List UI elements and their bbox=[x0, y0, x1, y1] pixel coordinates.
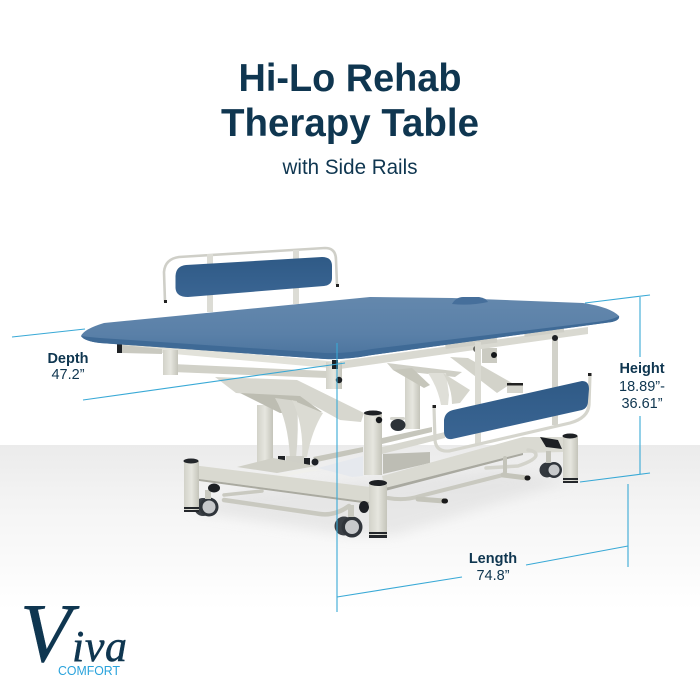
length lines bbox=[337, 343, 628, 612]
title: Therapy Table bbox=[221, 102, 479, 145]
length label bbox=[469, 551, 517, 584]
rear side rail bbox=[164, 248, 339, 312]
depth label: 47.2” bbox=[51, 367, 85, 383]
front side rail bbox=[432, 373, 592, 451]
depth lines bbox=[12, 329, 345, 400]
height label: Height bbox=[619, 361, 665, 377]
logo: Viva Comfort: COMFORT bbox=[58, 664, 120, 678]
depth label bbox=[47, 351, 89, 383]
frame posts bbox=[184, 410, 578, 538]
height label: 18.89”- bbox=[619, 379, 665, 395]
title bbox=[221, 57, 479, 145]
base frame bbox=[192, 437, 563, 504]
floor background bbox=[0, 445, 700, 610]
length label: Length bbox=[469, 551, 517, 567]
rear lift and base parts bbox=[313, 348, 523, 474]
front lift mechanism bbox=[215, 377, 364, 466]
height label bbox=[619, 361, 665, 412]
depth label: Depth bbox=[47, 351, 89, 367]
logo: Viva Comfort: Viva bbox=[20, 587, 127, 680]
subtitle: with Side Rails bbox=[282, 155, 418, 179]
casters bbox=[194, 437, 562, 538]
height label: 36.61” bbox=[621, 396, 663, 412]
table top bbox=[81, 297, 619, 359]
foot bars bbox=[224, 450, 536, 514]
floor shadow bbox=[190, 470, 570, 535]
therapy table illustration bbox=[81, 248, 619, 538]
front side rail posts bbox=[475, 335, 558, 444]
face cradle pad bbox=[452, 297, 488, 305]
under-table frame bbox=[117, 327, 588, 389]
title: Hi-Lo Rehab bbox=[238, 57, 462, 100]
length label: 74.8” bbox=[476, 568, 510, 584]
dimension lines bbox=[12, 295, 650, 612]
height lines bbox=[580, 295, 650, 482]
